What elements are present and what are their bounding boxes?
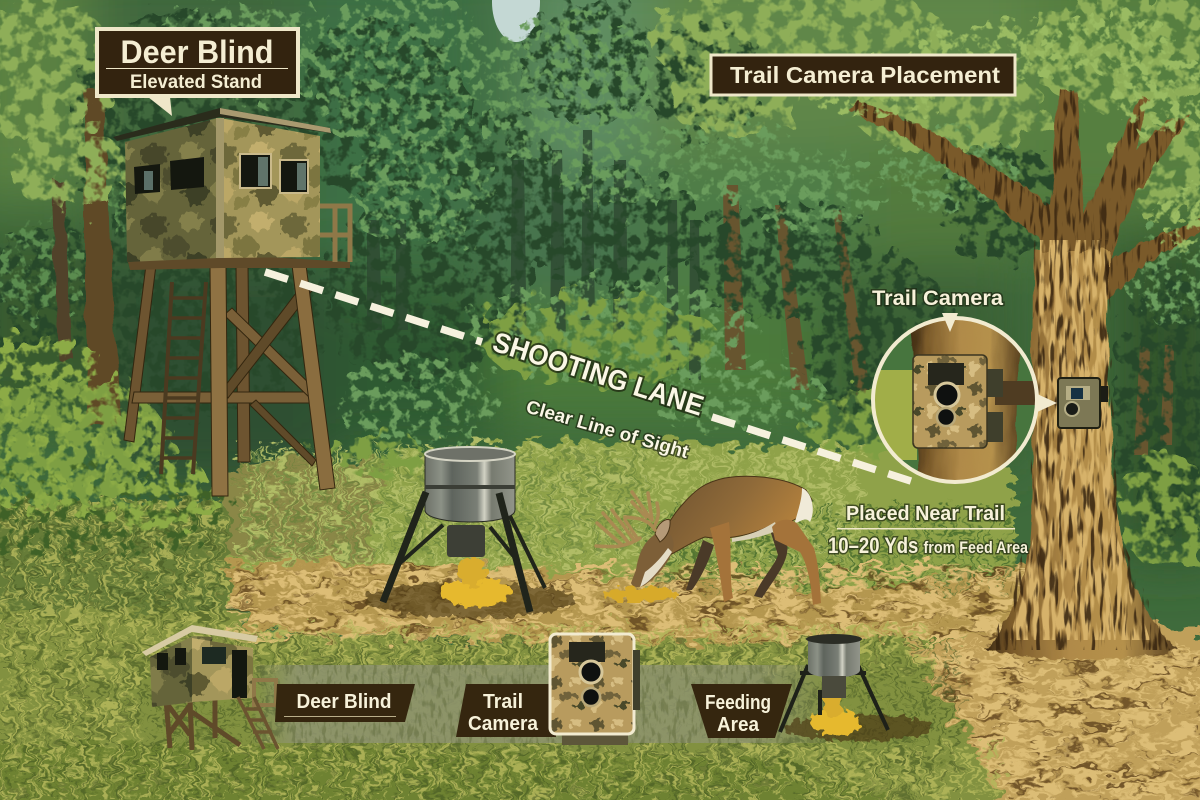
shooting lane label: SHOOTING LANE — [489, 326, 707, 422]
legend: feeding area label: Feeding — [705, 692, 771, 714]
shooting lane dashed line — [265, 272, 920, 484]
legend: deer blind label — [275, 684, 415, 722]
mid bush light clumps — [0, 295, 1200, 570]
small camera on tree — [1058, 378, 1108, 428]
label: trail camera heading: Trail Camera — [872, 287, 1003, 310]
legend: feeding area label: Area — [717, 714, 760, 736]
label: deer blind callout: Elevated Stand — [130, 72, 262, 93]
deer blind tower — [113, 108, 350, 496]
blind ladder — [161, 282, 206, 474]
grass texture — [0, 500, 1000, 800]
near legs — [710, 520, 821, 605]
legend: trail camera label: Camera — [468, 713, 539, 735]
distant trunks — [367, 130, 1174, 455]
label: placed near trail: 10–20 Yds from Feed Area — [828, 533, 1028, 558]
camera strap — [995, 381, 1035, 405]
label: placed near trail: Placed Near Trail — [846, 503, 1005, 525]
blind roof — [113, 108, 330, 141]
big camera — [913, 355, 1003, 448]
ground — [0, 441, 1200, 800]
body — [662, 476, 812, 556]
label: placed near trail — [828, 503, 1028, 558]
pointer down — [942, 313, 958, 332]
feeder — [365, 447, 575, 618]
legend: deer blind icon — [142, 625, 278, 750]
feeder front legs — [383, 492, 530, 612]
far foliage dark clumps — [0, 0, 1200, 530]
legend: trail camera label — [456, 684, 556, 737]
feeder back legs — [398, 516, 545, 588]
feed on ground near deer — [604, 586, 676, 602]
label: trail camera placement — [711, 55, 1015, 95]
legend band — [250, 665, 840, 743]
blind platform — [128, 254, 350, 270]
magnifier circle — [870, 313, 1057, 485]
blind windows — [134, 154, 308, 194]
meadow blades — [240, 445, 1015, 590]
pointer right — [1035, 393, 1057, 413]
big oak tree — [850, 90, 1200, 659]
left bush base — [0, 465, 230, 555]
crown leaves over branches — [810, 10, 1200, 245]
far legs — [686, 530, 787, 598]
head — [631, 530, 674, 587]
feeding area dirt patch — [784, 715, 932, 741]
blind legs and bracing — [124, 265, 335, 496]
label: trail camera placement: Trail Camera Placement — [730, 62, 1000, 88]
sky gap — [492, 0, 540, 42]
label: deer blind callout — [97, 29, 298, 116]
left tree trunks — [52, 90, 122, 425]
blind balcony — [320, 206, 350, 262]
legend: trail camera label: Trail — [483, 691, 523, 713]
far foliage mid clumps — [0, 0, 1200, 445]
antlers — [596, 492, 658, 547]
feeder drum — [425, 454, 515, 522]
clear line of sight label: Clear Line of Sight — [524, 396, 691, 462]
ear — [655, 520, 670, 542]
corn pile — [439, 558, 511, 607]
blind right wall — [220, 118, 320, 258]
dirt texture — [230, 565, 1200, 800]
legend: deer blind label: Deer Blind — [296, 691, 392, 713]
label: deer blind callout: Deer Blind — [120, 34, 274, 70]
corn — [809, 691, 861, 735]
tail — [795, 488, 813, 523]
legend: feeding area label — [691, 684, 792, 738]
legend: feeder icon — [780, 634, 888, 735]
ground base colours — [0, 441, 1200, 800]
crown light clumps behind tree — [0, 0, 1200, 220]
blind left wall — [125, 118, 218, 262]
deer — [596, 476, 821, 605]
left foreground bush — [0, 340, 215, 530]
feeder spout — [447, 525, 485, 557]
legend: trail camera icon — [550, 634, 640, 745]
